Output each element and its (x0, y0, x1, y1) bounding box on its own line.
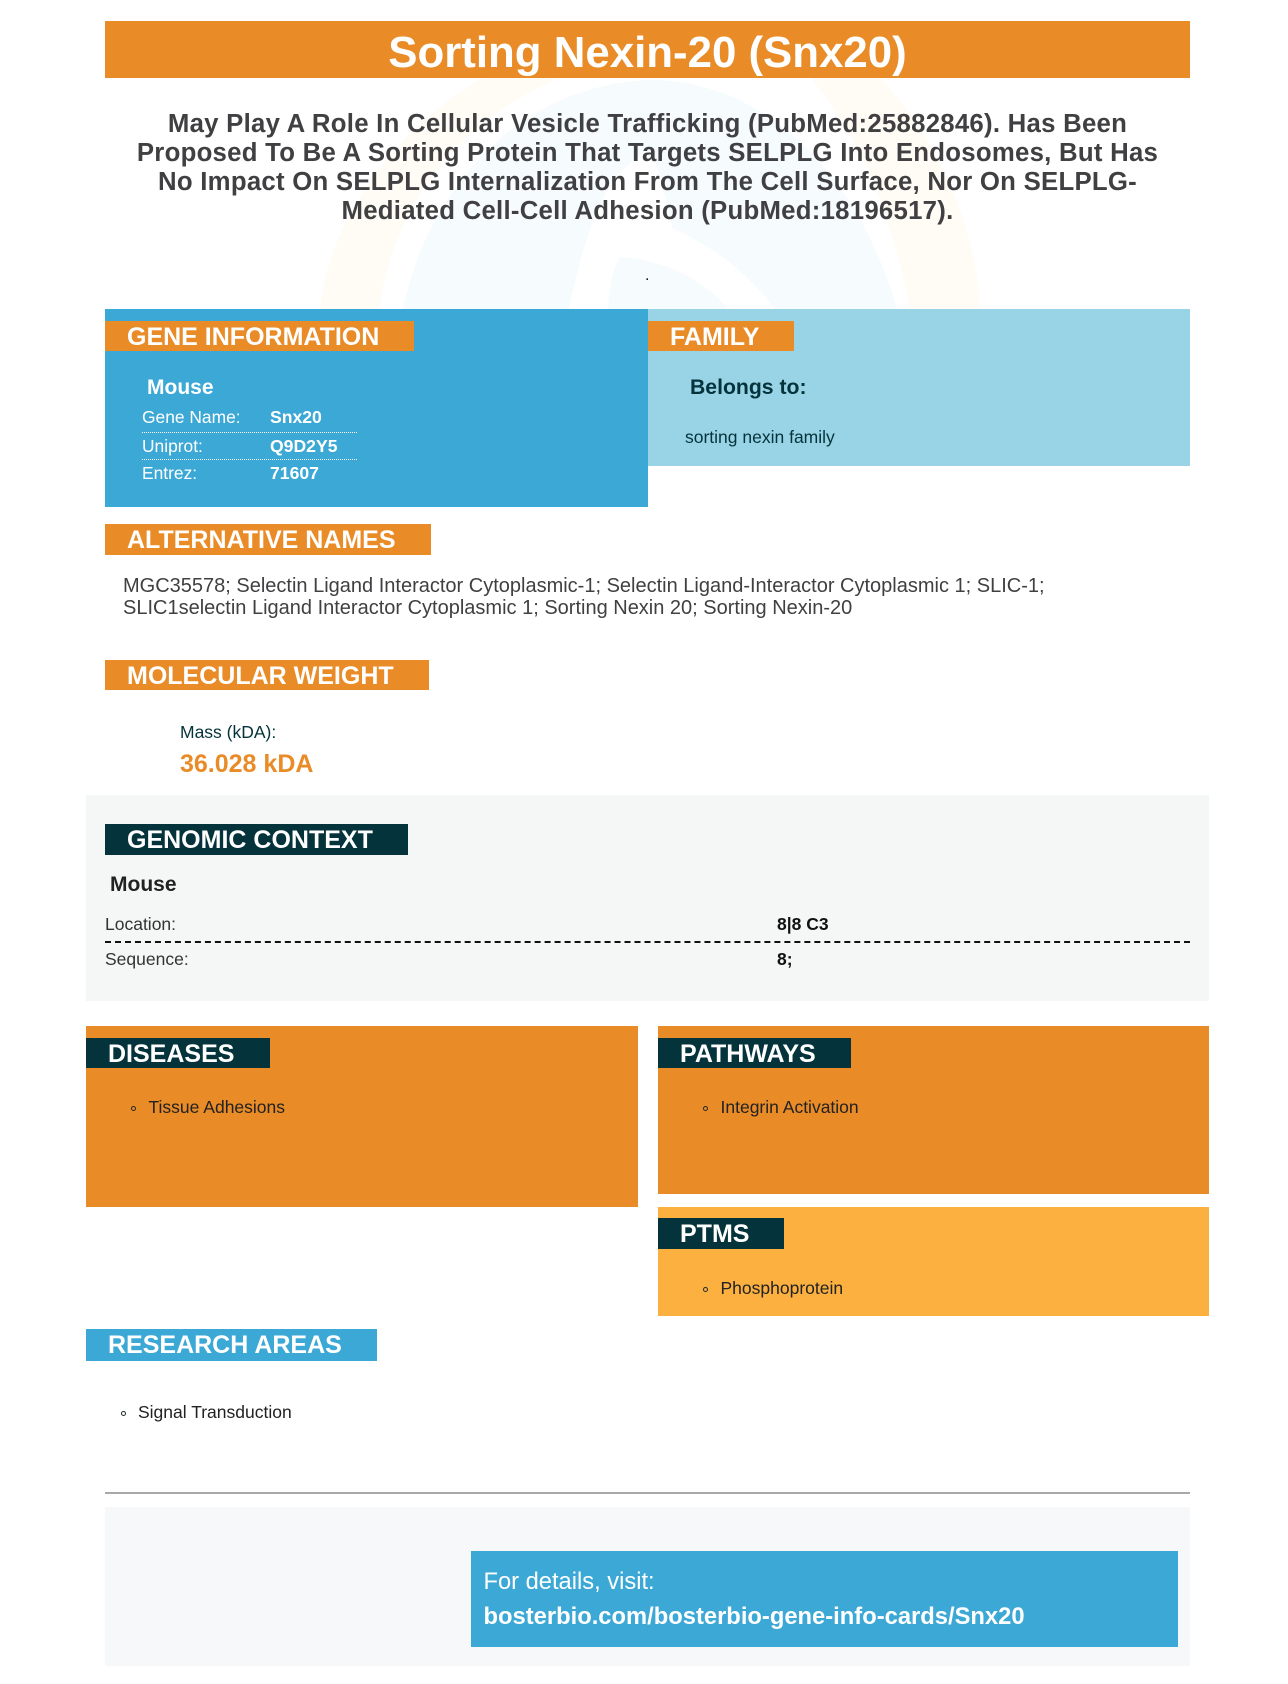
panel: footer (105, 1507, 1190, 1666)
panel: ptms (658, 1207, 1209, 1316)
summary description: No Impact On SELPLG Internalization From The Cell Surface, Nor On SELPLG- (158, 168, 1137, 196)
summary description (137, 110, 1158, 225)
row: uniprot (142, 433, 357, 460)
species label: Mouse (110, 873, 177, 896)
row: gene name: Gene Name: (142, 407, 241, 427)
title banner (105, 21, 1190, 78)
research area item: Signal Transduction (138, 1402, 292, 1422)
row: gene name: Snx20 (270, 407, 322, 427)
heading: family: FAMILY (670, 323, 759, 351)
row: uniprot: Q9D2Y5 (270, 436, 337, 456)
summary description: Proposed To Be A Sorting Protein That Targets SELPLG Into Endosomes, But Has (137, 139, 1158, 167)
centered dot: . (645, 267, 649, 284)
sequence row: 8; (777, 949, 793, 969)
row: entrez: Entrez: (142, 463, 197, 483)
location row: 8|8 C3 (777, 914, 829, 934)
ptm item: Phosphoprotein (720, 1278, 843, 1298)
sequence row: Sequence: (105, 949, 189, 969)
alternative names text: SLIC1selectin Ligand Interactor Cytoplasmic 1; Sorting Nexin 20; Sorting Nexin-20 (123, 597, 852, 619)
heading: ptms (658, 1218, 784, 1249)
heading: alternative names: ALTERNATIVE NAMES (127, 526, 396, 554)
heading: ptms: PTMS (680, 1220, 749, 1248)
belongs to label: Belongs to: (690, 376, 807, 399)
heading: diseases: DISEASES (108, 1040, 234, 1068)
alternative names text: MGC35578; Selectin Ligand Interactor Cytoplasmic-1; Selectin Ligand-Interactor Cytoplasmic 1; SLIC-1; (123, 575, 1045, 597)
disease item: Tissue Adhesions (148, 1097, 285, 1117)
title banner: Sorting Nexin-20 (Snx20) (388, 28, 907, 77)
row: gene name (142, 406, 357, 433)
summary description: Mediated Cell-Cell Adhesion (PubMed:18196517). (342, 197, 953, 225)
summary description: May Play A Role In Cellular Vesicle Trafficking (PubMed:25882846). Has Been (168, 110, 1127, 138)
family name: sorting nexin family (685, 427, 835, 447)
panel: pathways (658, 1026, 1209, 1194)
heading: pathways (658, 1038, 851, 1068)
row: entrez: 71607 (270, 463, 319, 483)
pathway item: Integrin Activation (720, 1097, 859, 1117)
heading: research areas: RESEARCH AREAS (108, 1331, 342, 1359)
background watermark logo (320, 78, 980, 309)
mass value: 36.028 kDA (180, 750, 313, 778)
row: entrez (142, 463, 319, 483)
callout: details link (471, 1551, 1178, 1647)
heading: pathways: PATHWAYS (680, 1040, 816, 1068)
row: uniprot: Uniprot: (142, 436, 203, 456)
species label: Mouse (147, 376, 214, 399)
panel: family (648, 309, 1190, 466)
alternative names text (123, 575, 1045, 619)
heading: molecular weight: MOLECULAR WEIGHT (127, 662, 394, 690)
heading: gene information: GENE INFORMATION (127, 323, 379, 351)
footer divider (105, 1492, 1190, 1494)
sequence row (105, 949, 793, 969)
location row (105, 912, 1190, 943)
heading: diseases (86, 1038, 270, 1068)
location row: Location: (105, 914, 176, 934)
panel: genomic context (86, 795, 1209, 1001)
mass label: Mass (kDA): (180, 722, 276, 742)
details url: bosterbio.com/bosterbio-gene-info-cards/Snx20 (484, 1603, 1025, 1630)
gene details table (142, 407, 357, 483)
heading: genomic context: GENOMIC CONTEXT (127, 826, 373, 854)
panel: gene information (105, 309, 648, 507)
panel: diseases (86, 1026, 638, 1207)
details label: For details, visit: (484, 1569, 655, 1595)
heading: family (648, 321, 794, 351)
